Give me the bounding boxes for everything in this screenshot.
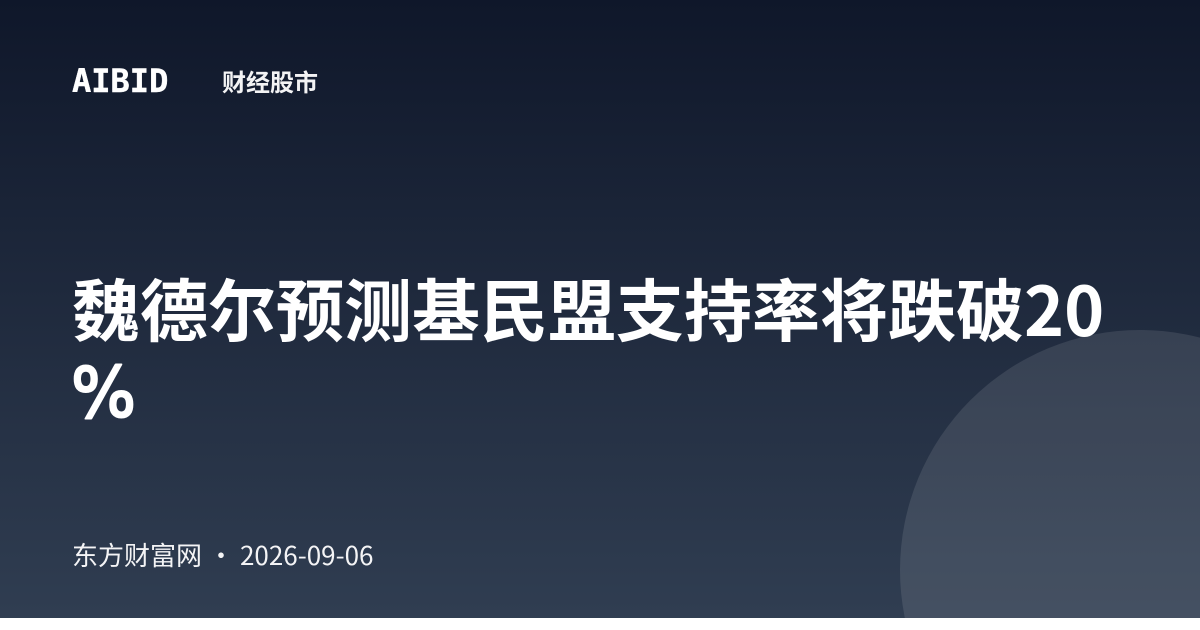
title xyxy=(66,257,1104,429)
decorative circle xyxy=(900,330,1200,618)
source and date: · xyxy=(208,536,234,573)
brand logo text: AIBID xyxy=(72,62,168,100)
category label: 财经股市 xyxy=(222,63,318,98)
source and date xyxy=(72,536,373,573)
source and date: 2026-09-06 xyxy=(240,536,373,573)
title: 魏德尔预测基民盟支持率将跌破20 xyxy=(72,257,1104,356)
title: % xyxy=(66,361,141,429)
source and date: 东方财富网 xyxy=(72,536,202,573)
